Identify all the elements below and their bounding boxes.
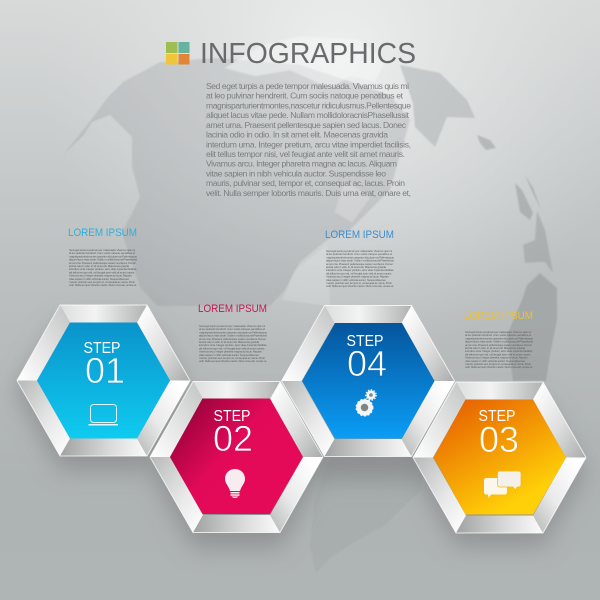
- heading: step 02: LOREM IPSUM: [198, 303, 267, 315]
- text block: step 01: velit. Nulla semper lobortis mauris. Duis urna erat, ornare et,: [69, 283, 137, 287]
- land: pale ocean patch: [282, 245, 330, 306]
- icon: light bulb: [225, 469, 245, 498]
- text block: step 04: magnisparturientmontes,nascetur ridiculusmus.Pellentesque: [326, 255, 394, 259]
- icon: laptop: [88, 404, 118, 426]
- world globe: [63, 36, 557, 573]
- text block: step 03: amet urna. Praesent pellentesque sapien sed lacus. Donec: [465, 343, 533, 347]
- text block: step 02: vitae sapien in nibh vehicula auctor. Suspendisse leo: [199, 353, 259, 357]
- text block: step 01: mauris, pulvinar sed, tempor et, consequat ac, lacus. Proin: [69, 280, 135, 284]
- text block: step 03: lacinia odio in odio. In sit amet elit. Maecenas gravida: [465, 346, 525, 350]
- text block: step 03: Vivamus arcu. Integer pharetra magna ac lacus. Aliquam: [465, 356, 529, 360]
- panel: step 02 hexagon: 02: [213, 418, 253, 459]
- text block: step 03: Sed eget turpis a pede tempor malesuada. Vivamus quis mi: [465, 330, 531, 334]
- text block: step 01: [69, 248, 137, 287]
- main text block: at leo pulvinar hendrerit. Cum sociis natoque penatibus et: [206, 91, 404, 101]
- text block: step 01: lacinia odio in odio. In sit amet elit. Maecenas gravida: [69, 264, 129, 268]
- text block: step 04: lacinia odio in odio. In sit amet elit. Maecenas gravida: [326, 265, 386, 269]
- text block: step 02: magnisparturientmontes,nascetur ridiculusmus.Pellentesque: [199, 330, 267, 334]
- main text block: Sed eget turpis a pede tempor malesuada. Vivamus quis mi: [206, 81, 409, 91]
- land: greenland: [400, 65, 475, 147]
- land: europe: [523, 211, 553, 273]
- text block: step 04: aliquet lacus vitae pede. Nullam mollidoloracnisPhasellussit: [326, 259, 394, 263]
- main text block: vitae sapien in nibh vehicula auctor. Suspendisse leo: [206, 168, 386, 178]
- heading: step 04: LOREM IPSUM: [325, 229, 394, 241]
- text block: step 04: amet urna. Praesent pellentesque sapien sed lacus. Donec: [326, 262, 394, 266]
- text block: step 04: Vivamus arcu. Integer pharetra magna ac lacus. Aliquam: [326, 275, 390, 279]
- text block: step 01: amet urna. Praesent pellentesque sapien sed lacus. Donec: [69, 261, 137, 265]
- panel: step 03 hexagon: [413, 382, 586, 533]
- text block: step 02: aliquet lacus vitae pede. Nullam mollidoloracnisPhasellussit: [199, 334, 267, 338]
- text block: step 03: magnisparturientmontes,nascetur ridiculusmus.Pellentesque: [465, 336, 533, 340]
- text block: step 02: mauris, pulvinar sed, tempor et, consequat ac, lacus. Proin: [199, 356, 265, 360]
- main text block: [206, 81, 411, 198]
- text block: step 04: mauris, pulvinar sed, tempor et, consequat ac, lacus. Proin: [326, 281, 392, 285]
- panel: step 02 hexagon: STEP: [214, 408, 250, 425]
- land: british isles: [515, 183, 533, 220]
- text block: step 03: at leo pulvinar hendrerit. Cum sociis natoque penatibus et: [465, 333, 531, 337]
- text block: step 04: velit. Nulla semper lobortis mauris. Duis urna erat, ornare et,: [326, 284, 394, 288]
- text block: step 03: [465, 330, 533, 369]
- text block: step 02: [199, 324, 267, 363]
- heading: step 01: LOREM IPSUM: [68, 227, 137, 239]
- main text block: aliquet lacus vitae pede. Nullam mollidoloracnisPhasellussit: [206, 110, 410, 120]
- panel: step 04 hexagon: STEP: [346, 333, 384, 350]
- main text block: velit. Nulla semper lobortis mauris. Duis urna erat, ornare et,: [206, 188, 411, 198]
- text block: step 03: vitae sapien in nibh vehicula auctor. Suspendisse leo: [465, 359, 525, 363]
- text block: step 01: aliquet lacus vitae pede. Nullam mollidoloracnisPhasellussit: [69, 258, 137, 262]
- land: norway: [525, 175, 541, 210]
- panel: step 02 hexagon: [150, 382, 323, 532]
- main text block: elit tellus tempor nisi, vel feugiat ante velit sit amet mauris.: [206, 149, 405, 159]
- text block: step 03: elit tellus tempor nisi, vel feugiat ante velit sit amet mauris.: [465, 352, 531, 356]
- panel: step 01 hexagon: [17, 305, 190, 456]
- text block: step 02: lacinia odio in odio. In sit amet elit. Maecenas gravida: [199, 340, 259, 344]
- text block: step 02: elit tellus tempor nisi, vel feugiat ante velit sit amet mauris.: [199, 346, 265, 350]
- panel: step 03 hexagon: STEP: [478, 408, 516, 425]
- text block: step 02: amet urna. Praesent pellentesque sapien sed lacus. Donec: [199, 337, 267, 341]
- text block: step 03: velit. Nulla semper lobortis mauris. Duis urna erat, ornare et,: [465, 365, 533, 369]
- main text block: lacinia odio in odio. In sit amet elit. Maecenas gravida: [206, 130, 388, 140]
- text block: step 04: [326, 249, 394, 288]
- text block: step 02: at leo pulvinar hendrerit. Cum sociis natoque penatibus et: [199, 327, 265, 331]
- text block: step 04: vitae sapien in nibh vehicula auctor. Suspendisse leo: [326, 278, 386, 282]
- land: arctic islands: [225, 36, 385, 88]
- land: north america: [63, 58, 410, 306]
- text block: step 02: interdum urna. Integer pretium, arcu vitae imperdiet facilisis,: [199, 343, 267, 347]
- text block: step 01: elit tellus tempor nisi, vel feugiat ante velit sit amet mauris.: [69, 270, 135, 274]
- main text block: amet urna. Praesent pellentesque sapien sed lacus. Donec: [206, 120, 407, 130]
- text block: step 01: interdum urna. Integer pretium, arcu vitae imperdiet facilisis,: [69, 267, 137, 271]
- text block: step 01: magnisparturientmontes,nascetur ridiculusmus.Pellentesque: [69, 254, 137, 258]
- main text block: magnisparturientmontes,nascetur ridiculusmus.Pellentesque: [206, 100, 411, 110]
- land: iceland: [477, 135, 496, 150]
- land: south america: [310, 456, 421, 573]
- hexagon shadows: [15, 320, 586, 548]
- title: INFOGRAPHICS: [200, 38, 416, 70]
- main text block: Vivamus arcu. Integer pharetra magna ac lacus. Aliquam: [206, 159, 397, 169]
- text block: step 04: interdum urna. Integer pretium, arcu vitae imperdiet facilisis,: [326, 268, 394, 272]
- text block: step 04: at leo pulvinar hendrerit. Cum sociis natoque penatibus et: [326, 252, 392, 256]
- main text block: interdum urna. Integer pretium, arcu vitae imperdiet facilisis,: [206, 139, 411, 149]
- text block: step 04: Sed eget turpis a pede tempor malesuada. Vivamus quis mi: [326, 249, 392, 253]
- text block: step 03: interdum urna. Integer pretium, arcu vitae imperdiet facilisis,: [465, 349, 533, 353]
- text block: step 02: Sed eget turpis a pede tempor malesuada. Vivamus quis mi: [199, 324, 265, 328]
- icon: chat bubbles: [484, 471, 521, 498]
- panel: step 04 hexagon: 04: [347, 343, 387, 384]
- main text block: mauris, pulvinar sed, tempor et, consequat ac, lacus. Proin: [206, 178, 405, 188]
- icon: gears: [356, 390, 376, 416]
- text block: step 01: Vivamus arcu. Integer pharetra magna ac lacus. Aliquam: [69, 274, 133, 278]
- text block: step 02: Vivamus arcu. Integer pharetra magna ac lacus. Aliquam: [199, 350, 263, 354]
- panel: step 04 hexagon: [282, 306, 454, 456]
- land: hudson patches: [335, 180, 370, 222]
- land: africa: [507, 273, 557, 381]
- panel: step 01 hexagon: 01: [85, 350, 125, 391]
- panel: step 01 hexagon: STEP: [84, 340, 120, 357]
- text block: step 01: at leo pulvinar hendrerit. Cum sociis natoque penatibus et: [69, 251, 135, 255]
- text block: step 03: aliquet lacus vitae pede. Nullam mollidoloracnisPhasellussit: [465, 340, 533, 344]
- panel: step 03 hexagon: 03: [479, 419, 519, 460]
- text block: step 03: mauris, pulvinar sed, tempor et, consequat ac, lacus. Proin: [465, 362, 531, 366]
- text block: step 02: velit. Nulla semper lobortis mauris. Duis urna erat, ornare et,: [199, 359, 267, 363]
- heading: step 03: LOREM IPSUM: [464, 310, 533, 322]
- text block: step 04: elit tellus tempor nisi, vel feugiat ante velit sit amet mauris.: [326, 271, 392, 275]
- text block: step 01: vitae sapien in nibh vehicula auctor. Suspendisse leo: [69, 277, 129, 281]
- logo: [166, 42, 190, 64]
- text block: step 01: Sed eget turpis a pede tempor malesuada. Vivamus quis mi: [69, 248, 135, 252]
